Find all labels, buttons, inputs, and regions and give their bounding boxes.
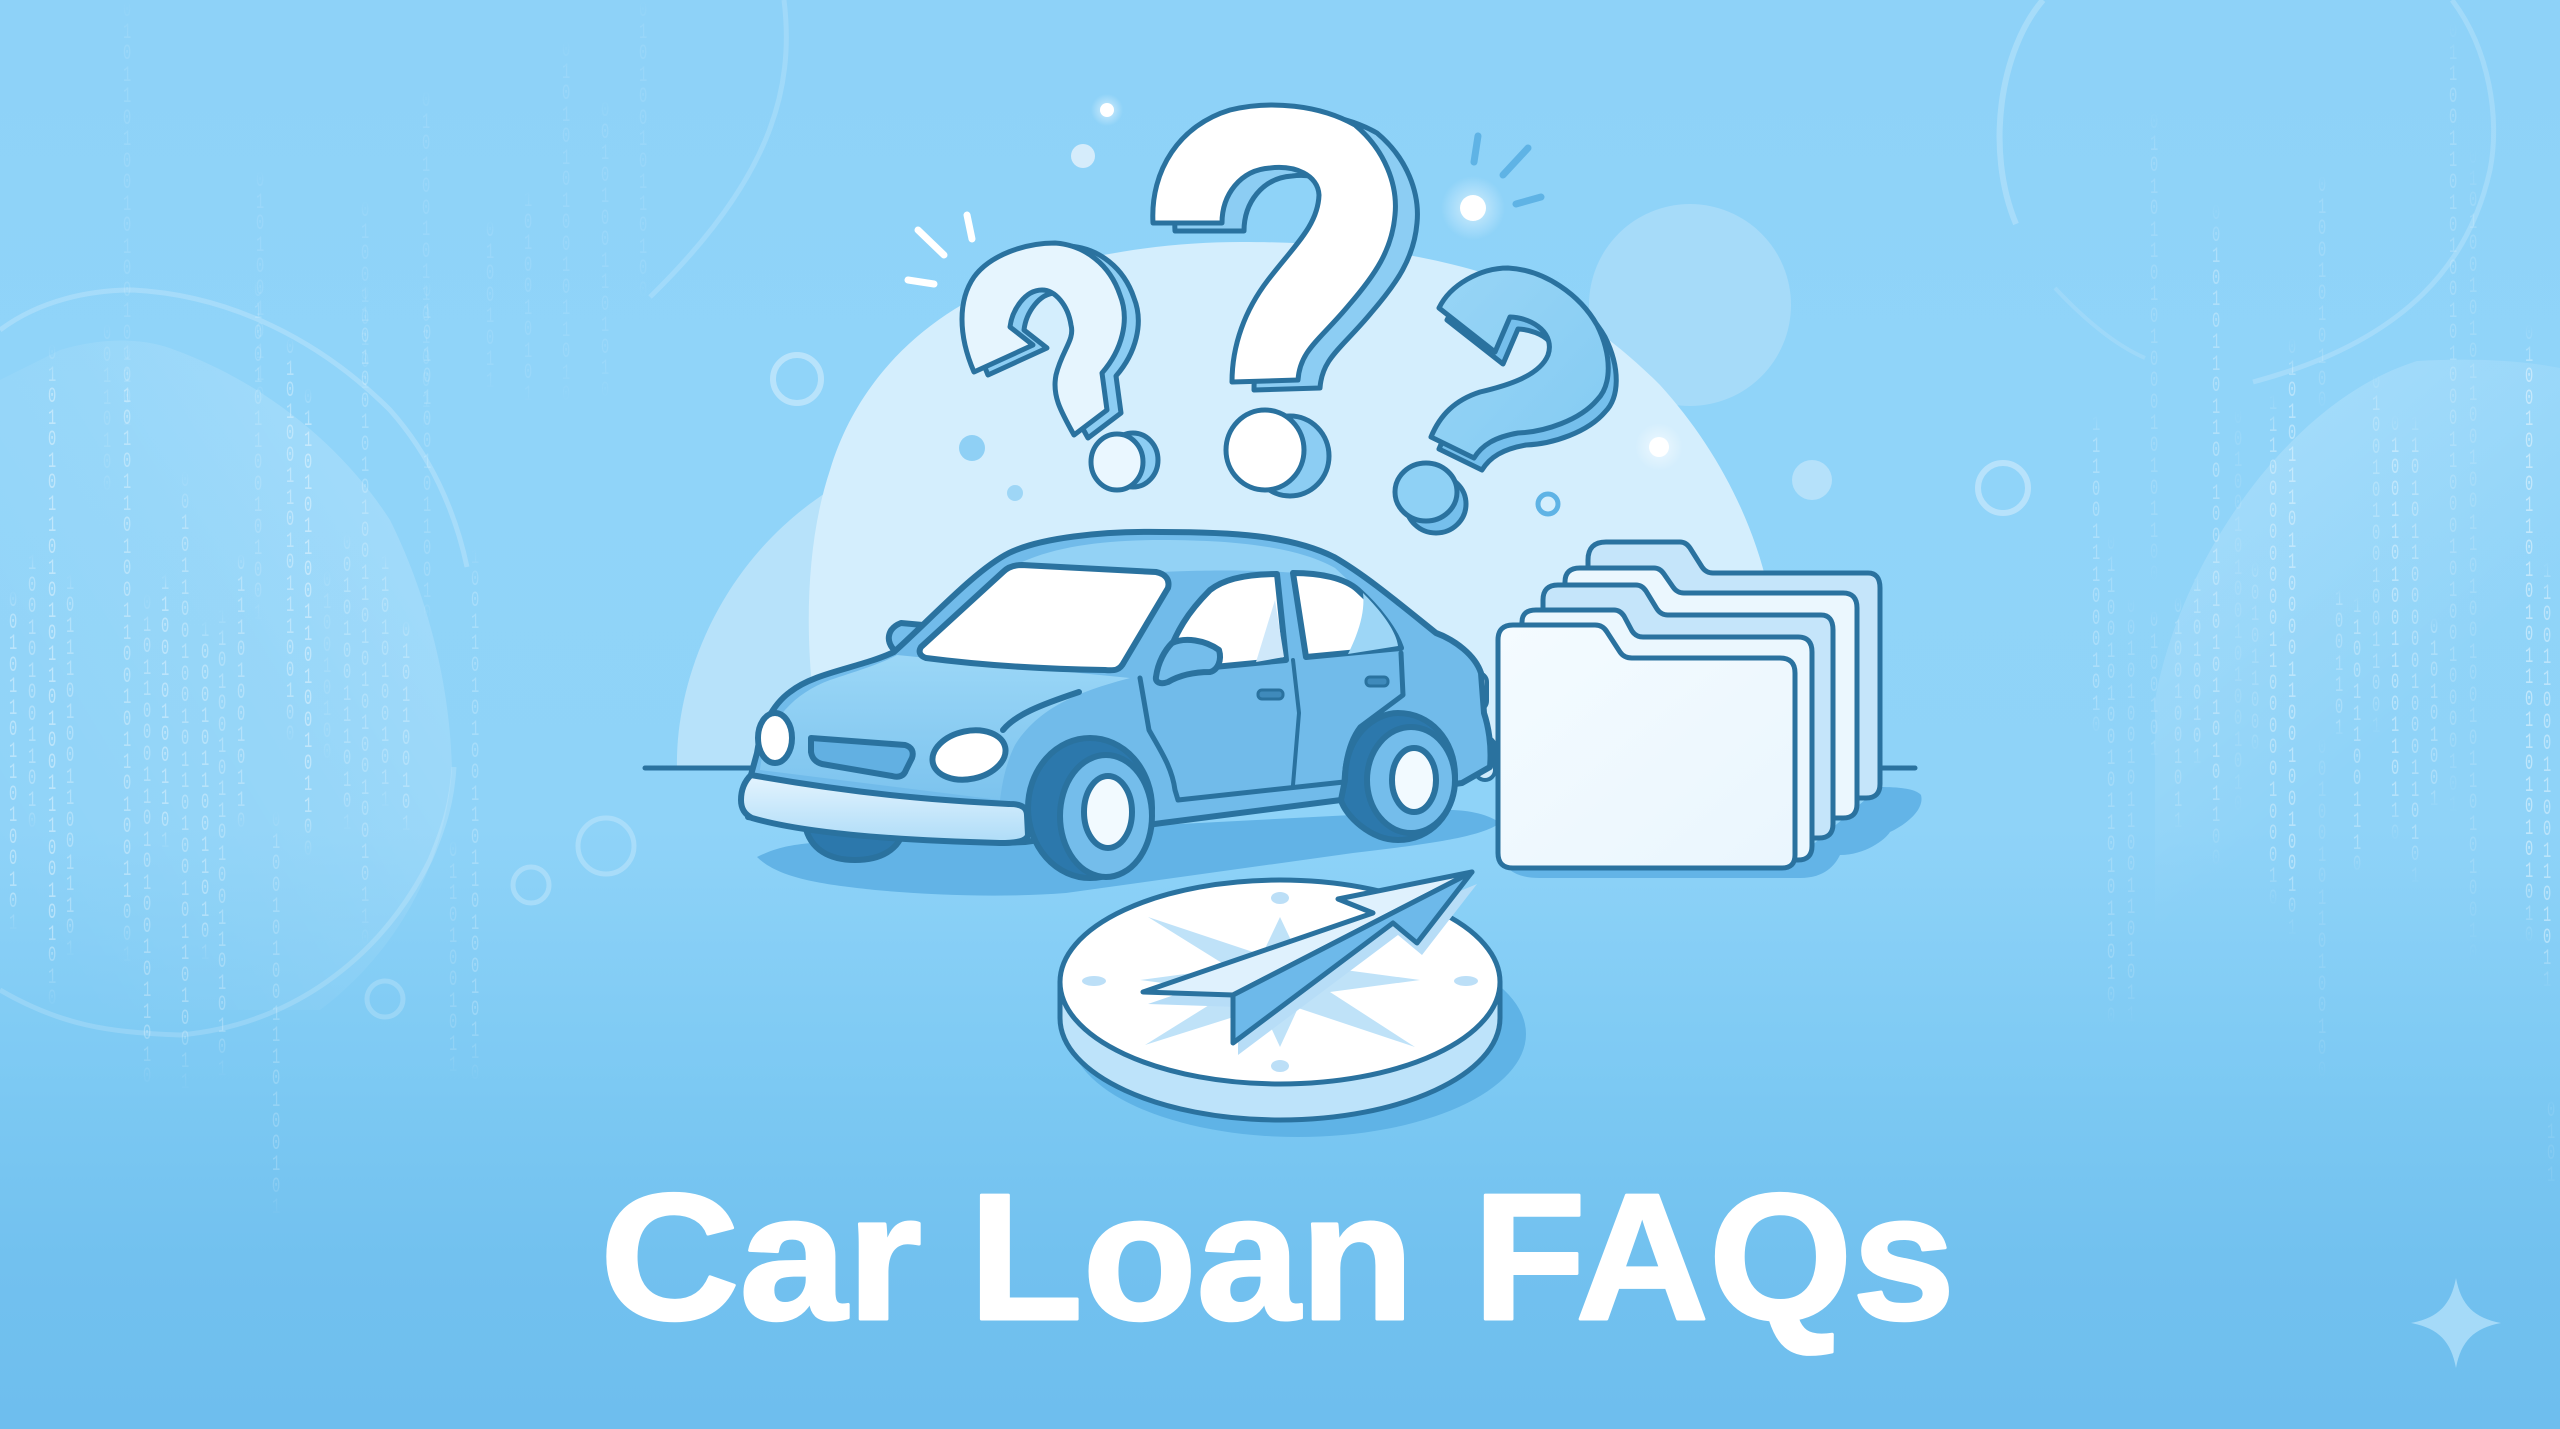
binary code rain columns: 00101001011001101011 [2127, 594, 2135, 1028]
front underside wheel [805, 825, 904, 860]
binary code rain columns: 01100101001011010110100 [2107, 531, 2115, 1029]
binary code rain columns: 11001100011001101011 [2543, 559, 2551, 992]
ground line [645, 766, 1915, 770]
tail lights [1467, 673, 1495, 780]
binary code rain columns: 01001101001100110110 [2391, 412, 2399, 846]
binary code rain columns: 010010100 [323, 568, 331, 765]
dot: pale upper [1071, 144, 1095, 168]
decorative ring: lower left large [578, 818, 634, 874]
compass [1060, 872, 1526, 1137]
needle shadow [1148, 884, 1477, 1055]
blob: left translucent shape [0, 341, 452, 1010]
side mirror [1156, 640, 1220, 683]
binary code rain columns: 00101011010011001011010011001 [123, 341, 131, 968]
folder 3 [1530, 585, 1833, 838]
folders shadow [1510, 787, 1922, 878]
binary code rain columns: 1001010011010 [28, 551, 36, 834]
compass marks [1082, 892, 1478, 1072]
headlight right [928, 724, 1010, 786]
folder 4 [1540, 568, 1857, 818]
binary code rain columns: 01001010010011001 [2372, 370, 2380, 739]
binary code rain columns: 0111010010110 [237, 551, 245, 834]
binary code rain columns: 00110100 [103, 321, 111, 496]
side window front shade [1256, 600, 1284, 662]
binary code rain columns: 0101100101 [402, 618, 410, 836]
question mark: right [1395, 268, 1616, 533]
left mirror [889, 623, 923, 650]
binary code rain columns: 00101001110101 [343, 531, 351, 836]
binary code rain columns: 1000101100110101 [201, 618, 209, 966]
decorative ring: lower left small [513, 867, 549, 903]
binary code rain columns: 0101001011010010 [422, 88, 430, 436]
glowing dot: right [1635, 423, 1683, 471]
binary code rain columns: 0100101011 [361, 198, 369, 416]
binary code rain columns: 0010101101100100101010110101100 [2212, 201, 2220, 871]
binary code rain columns: 1001101010011011010010110 [471, 545, 479, 1086]
rear wheel [1341, 713, 1455, 840]
binary code rain columns: 01010010101100100110100100101101010010 [2469, 145, 2477, 966]
glowing dot: upper right [1441, 176, 1505, 240]
binary code rain columns: 0101010110101011010011100101010 [48, 341, 56, 1011]
folder 5 [1560, 542, 1880, 798]
door centre line [1293, 660, 1299, 785]
binary code rain columns: 1101011000001000110101 [2411, 412, 2419, 888]
binary code rain columns: 01011000110101001011010 [143, 591, 151, 1089]
binary code rain columns: 110101001011 [381, 551, 389, 812]
background dot: right of dome [1792, 460, 1832, 500]
group: question marks [908, 94, 1683, 533]
door handles [1258, 677, 1388, 699]
binary code rain columns: 0101 [2547, 1098, 2555, 1188]
car body [748, 532, 1491, 843]
arc: left large circle top [0, 290, 467, 567]
binary code rain columns: 010110100101001011010 [123, 0, 131, 453]
side window front [1162, 574, 1286, 672]
binary code rain columns: 01101001011 [449, 838, 457, 1078]
binary code rain columns: 00101001101010 [601, 98, 609, 402]
binary code rain columns: 01010101001011010 [562, 38, 570, 407]
sparks: left white dashes [908, 215, 972, 284]
binary code rain columns: 1100101001101 [161, 571, 169, 854]
question mark: centre [1153, 105, 1417, 496]
binary code rain columns: 0100101001110100101 [272, 808, 280, 1220]
star: bottom right sparkle [2411, 1278, 2501, 1368]
blob: right translucent shape [2155, 360, 2560, 1050]
decorative ring: right [1978, 463, 2028, 513]
front bumper [741, 775, 1028, 843]
background circle: upper right [1589, 204, 1791, 406]
hood light area [760, 655, 1130, 800]
binary code rain columns: 01001001011 [2174, 594, 2182, 834]
grille [811, 738, 913, 777]
binary code rain columns: 010101001 [2430, 615, 2438, 812]
arc: top-left quarter circle [650, 0, 786, 297]
compass face [1060, 880, 1500, 1084]
arc: top-right circle right side [2253, 0, 2494, 382]
binary code rain columns: 01001011 [486, 218, 494, 394]
title: Loan [969, 1157, 1414, 1358]
roof highlight [1022, 540, 1380, 610]
binary code rain columns: 001011000 [2251, 559, 2259, 756]
compass shadow [1070, 931, 1526, 1137]
arc: left large circle bottom [0, 767, 454, 1035]
side window rear [1293, 573, 1401, 657]
dot: blue left [959, 435, 985, 461]
sparks: right blue dashes [1474, 136, 1541, 204]
hood crease [1003, 692, 1079, 730]
dot: small blue left [1007, 485, 1023, 501]
binary code rain columns: 01001010100 [2318, 173, 2326, 413]
binary code rain columns: 0110011010100101000110001010010000101 [2449, 19, 2457, 818]
title: Car [600, 1157, 922, 1358]
binary code rain columns: 0101011101100001100100100101 [2288, 335, 2296, 940]
binary code rain columns: 0100101100101001 [254, 278, 262, 626]
title: FAQs [1473, 1157, 1955, 1358]
binary code rain columns: 00101100100101101001011010011 [181, 468, 189, 1095]
folder 2 [1510, 610, 1812, 860]
needle [1143, 872, 1472, 1043]
arc: top-right circle left side [2000, 0, 2043, 224]
ring: small blue [1538, 494, 1558, 514]
binary code rain columns: 01010010110 [256, 168, 264, 408]
binary code rain columns: 0101001101011100100 [286, 335, 294, 747]
binary code rain columns: 01001010110101011011010101010 [2525, 321, 2533, 948]
blob: light central dome [809, 242, 1775, 768]
blob: darker left hill [677, 480, 1000, 768]
binary code rain columns: 111000000001100000100010 [2269, 391, 2277, 910]
front wheel [1028, 738, 1152, 878]
folder front [1498, 625, 1795, 868]
compass rose [1140, 917, 1420, 1047]
binary code rain columns: 1100111001110 [2353, 594, 2361, 877]
windshield [920, 565, 1168, 670]
binary code rain columns: 110100101 [2193, 573, 2201, 770]
binary code rain columns: 111001110001010 [2092, 412, 2100, 738]
compass side [1060, 982, 1500, 1120]
binary code rain columns: 0101011010100010101100 [2150, 110, 2158, 586]
question mark: left [962, 243, 1158, 490]
binary code rain columns: 101110100110011101 [66, 571, 74, 962]
binary code rain columns: 0101010010110010 [423, 278, 431, 626]
shadow: car [757, 810, 1500, 896]
headlight left [758, 713, 792, 763]
folder stack [1498, 542, 1880, 868]
decorative ring: upper left [773, 355, 821, 403]
glowing dot: top [1091, 94, 1123, 126]
binary code rain columns: 0101001010100110101010010010110 [361, 281, 369, 951]
door lines [1140, 653, 1403, 800]
binary code rain columns: 0010010110100100 [2318, 735, 2326, 1082]
binary code rain columns: 1001101 [2335, 587, 2343, 741]
car [741, 532, 1495, 878]
binary code rain columns: 0010010100101001010 [2234, 405, 2242, 817]
side window rear shade [1348, 593, 1398, 654]
binary code rain columns: 1010010101 [524, 188, 532, 406]
binary code rain columns: 0010110110100101 [9, 588, 17, 936]
binary code rain columns: 01010010110100 [639, 0, 647, 302]
binary code rain columns: 0110101100110100101100 [304, 385, 312, 862]
binary code rain columns: 0100101 [2150, 608, 2158, 762]
arc: top-right circle lower left [2055, 288, 2145, 358]
binary code rain columns: 1101001011010011010101 [218, 605, 226, 1082]
decorative ring: far lower left [367, 981, 403, 1017]
